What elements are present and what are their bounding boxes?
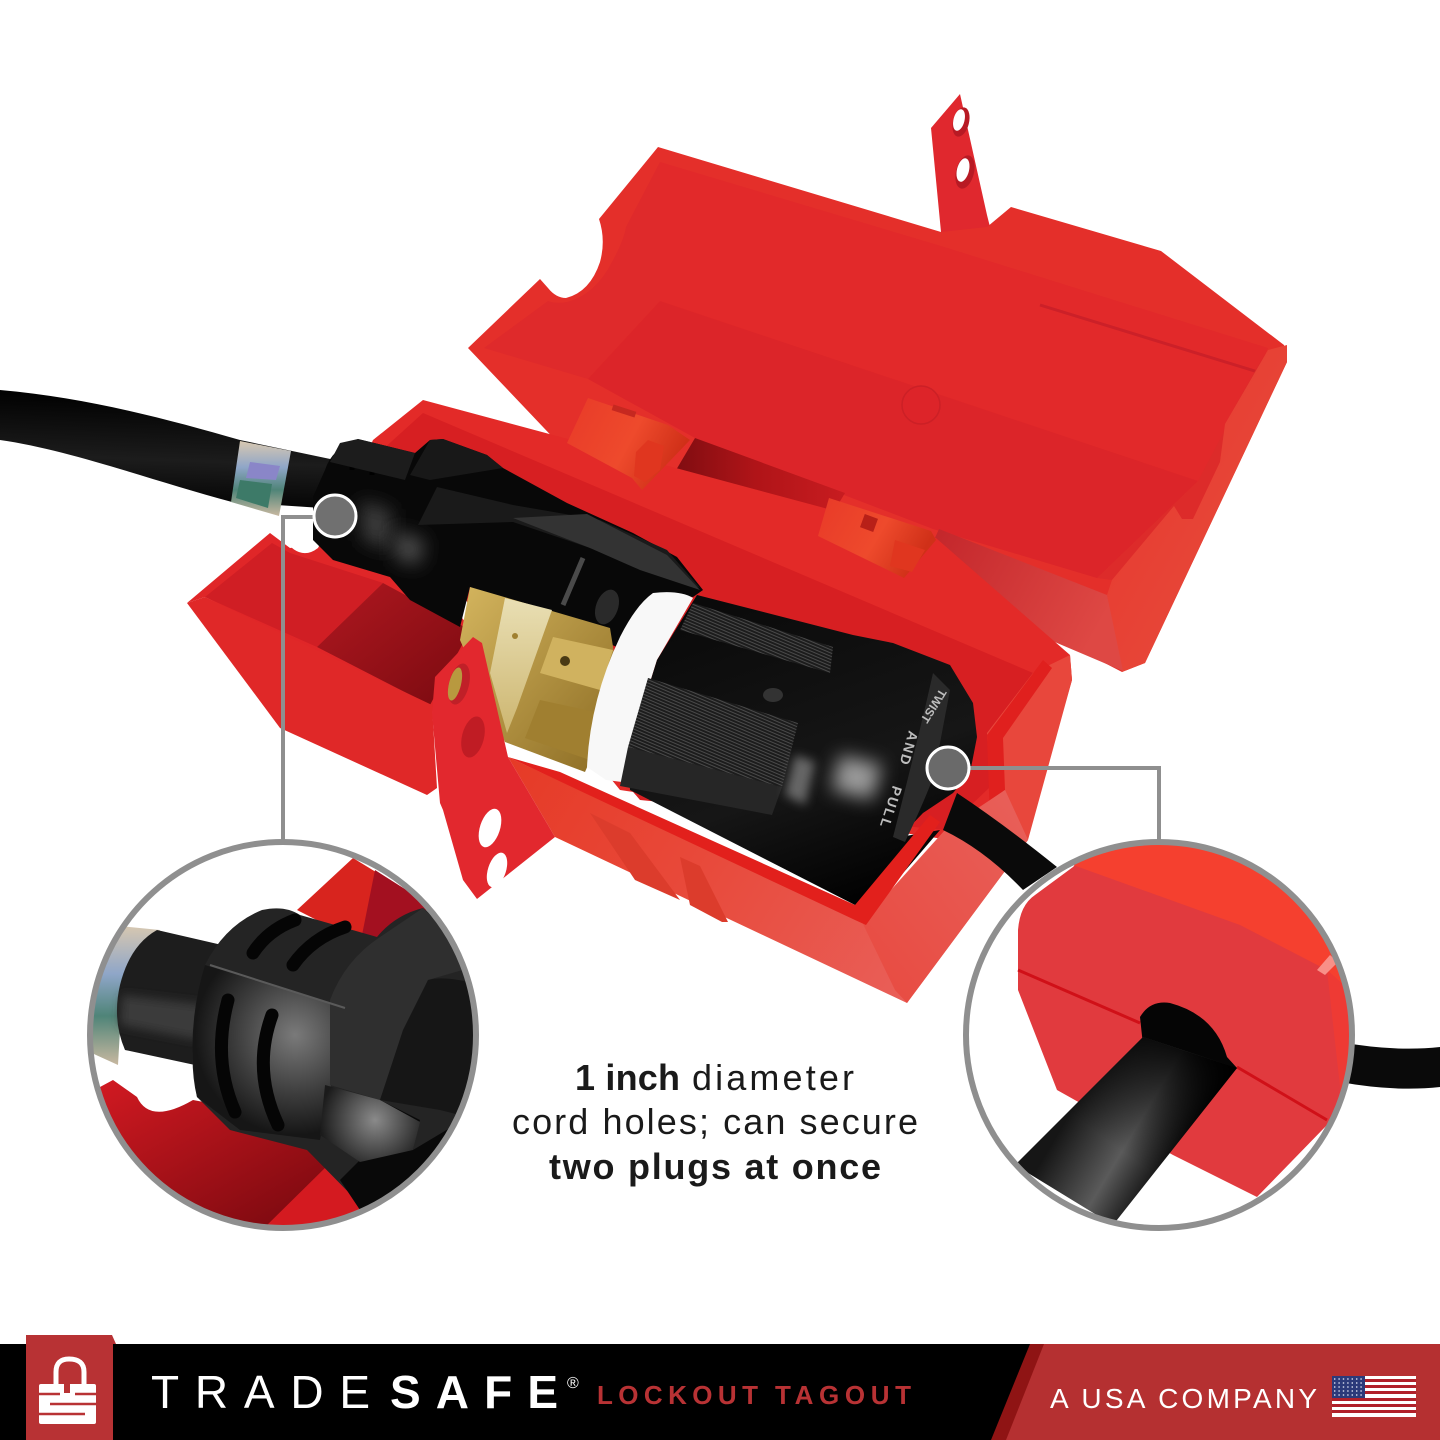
caption text: diameter	[692, 1057, 854, 1098]
callout marker, right	[927, 747, 969, 789]
caption text: cord holes; can secure	[512, 1101, 918, 1142]
cord tail beyond right inset	[1340, 1042, 1440, 1089]
moulded text on receptacle: AND	[896, 729, 921, 769]
cord, right exit	[943, 793, 1057, 890]
lid back wall	[660, 162, 1268, 481]
receptacle cylinder	[620, 595, 977, 905]
silver end band	[893, 673, 950, 842]
lid locking tab	[931, 94, 992, 242]
plug handle ridge	[418, 487, 700, 628]
lid slot between hinges	[666, 438, 845, 538]
brand name: ®	[567, 1375, 579, 1392]
base front wall, left section	[187, 597, 437, 795]
moulded text on receptacle	[876, 686, 949, 831]
moulded text on receptacle: PULL	[876, 784, 905, 831]
red box end	[1017, 845, 1349, 1197]
inset circle: cord hole detail	[966, 820, 1370, 1228]
footer red section	[991, 1344, 1440, 1440]
product line name	[597, 1380, 911, 1410]
plug, black body	[313, 439, 703, 647]
collar slots	[221, 920, 345, 1125]
front locking tab with holes	[432, 637, 555, 899]
lid left end wall	[484, 162, 660, 379]
callout line, left	[283, 517, 318, 840]
brass plug blades	[460, 587, 620, 772]
plug collar texture	[330, 439, 503, 565]
base front wall, right section	[508, 757, 1028, 1003]
red box background	[85, 858, 430, 1240]
product line name: TAGOUT	[775, 1380, 911, 1410]
electrical cord, left	[0, 390, 335, 516]
black cord through hole	[1015, 1003, 1237, 1225]
plug collar	[192, 908, 473, 1209]
hinge right	[818, 498, 936, 578]
company tagline: A USA COMPANY	[1050, 1383, 1317, 1414]
product line name: LOCKOUT	[597, 1380, 758, 1410]
rib details	[590, 813, 728, 922]
lid floor	[588, 301, 1198, 578]
caption text: 1 inch	[575, 1057, 680, 1098]
lid right end inner wall	[1097, 348, 1268, 580]
box base, back flange and interior	[360, 400, 1072, 850]
product: open red lockout box with plug	[0, 94, 1287, 1003]
caption text: two plugs at once	[549, 1146, 881, 1187]
base left compartment interior	[187, 525, 480, 712]
hinge left	[567, 398, 690, 490]
white ring	[587, 592, 693, 783]
hologram band	[231, 441, 291, 516]
caption text	[512, 1057, 918, 1187]
lid right end outer wall	[1107, 345, 1287, 672]
brand name	[151, 1366, 579, 1418]
brand name: SAFE	[390, 1366, 558, 1418]
cord and hologram band	[85, 925, 222, 1065]
box lid, open	[468, 147, 1287, 672]
moulded text on receptacle: TWIST	[917, 686, 949, 726]
brand name: TRADE	[151, 1366, 370, 1418]
inset circle: plug strain relief detail	[85, 842, 490, 1240]
icon: american flag	[1332, 1376, 1416, 1417]
footer bar	[0, 1335, 1440, 1440]
ribbed bands	[628, 603, 833, 787]
lid front outer wall	[925, 529, 1123, 671]
logo tab with padlock icon	[26, 1335, 116, 1440]
callout line, right	[970, 768, 1159, 840]
callout marker, left	[314, 495, 356, 537]
